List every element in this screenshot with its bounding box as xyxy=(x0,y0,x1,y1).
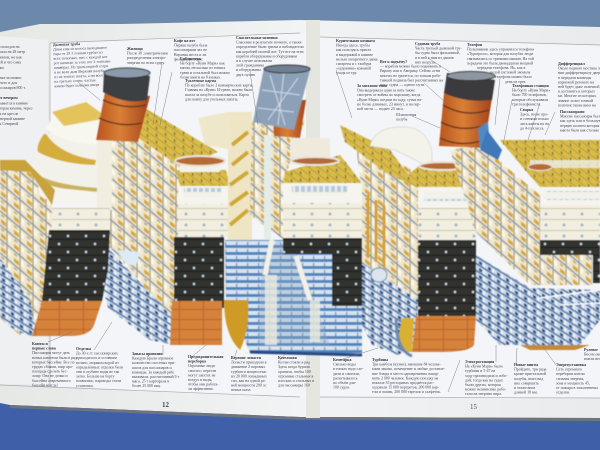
text: bottom panel caption: Отделка xyxy=(76,347,91,351)
text: speaker caption: Она выдержала один за пять также xyxy=(357,89,415,93)
text: differential caption: в передачи команды xyxy=(558,76,592,80)
text: stokers caption: После 30 ,электрические xyxy=(127,52,168,57)
text: second funnel caption: Часть третьей дымовой тру- xyxy=(415,47,463,51)
text: bottom shaft caption: от пожара в заполненных xyxy=(556,386,598,390)
text: bottom hold caption: пасов для пассажиров и xyxy=(132,366,172,370)
engine room: blue machinery centre xyxy=(224,240,362,355)
text: bottom compass caption: первые слова xyxy=(32,347,56,351)
text: bottom bilge caption: расчитывалось xyxy=(333,376,358,380)
decks and machinery between sections 4 and 5 xyxy=(450,145,600,350)
text: bottom hold caption: более 25 000 яиц. xyxy=(132,384,161,388)
text: differential caption: Дифференциал xyxy=(558,62,586,66)
text: bottom propellers caption: Новые винты xyxy=(514,363,538,367)
text: question caption: Вот к подъёму? xyxy=(380,60,407,64)
text: telephone central caption: Телефонная станция xyxy=(512,84,549,88)
text: lifeboats caption: корабля оборудованы и оборудованы xyxy=(236,54,298,58)
text: bottom turbines caption: вокзале 35 ресторанах продаётся рас- xyxy=(372,381,435,385)
text: telephone caption: день из трех. xyxy=(505,80,526,84)
text: library caption: капли, несколько из тонких xyxy=(180,66,225,71)
page number 15: 15 xyxy=(470,403,478,411)
text: bottom boilers caption: Лопасти приходили в xyxy=(231,361,267,365)
text: bottom panel caption: установка. xyxy=(76,384,94,388)
text: bottom bilge caption: дили и сжигали, xyxy=(333,372,360,377)
text: bottom compass caption: новых каютами были в ряд xyxy=(32,356,77,360)
text: cards caption: По кораблю было 2 коммерческих карты. xyxy=(185,84,253,88)
text: lifeboats caption: этой гражданина xyxy=(236,64,264,68)
text: differential caption: кормовой рулевого на xyxy=(558,80,594,84)
decks between sections 1 and 2 xyxy=(104,105,218,345)
text: bell caption: и сотнями только xyxy=(520,117,549,121)
text: stokers caption: распределения электро- xyxy=(127,56,167,60)
text: telephone caption: передачи это была двенадцатая мощной xyxy=(467,61,533,65)
text: funnel caption: пиявбрал. Из трюм первой сотри xyxy=(54,64,108,70)
text: bottom furnace caption: Котлы стояли в ряд xyxy=(278,361,310,365)
text: bottom compass caption: которых бассейне. Все по xyxy=(32,360,75,364)
text: lifeboats caption: как кораблей полной вот. Тут все на этих xyxy=(236,50,304,54)
text: bottom furnace caption: хранили, чтобы 100 xyxy=(278,370,311,375)
text: question caption: Европу или в Америку. Сейчас огни xyxy=(380,69,440,73)
text: funnel caption: Днем еще из колоса выходящего xyxy=(53,46,107,52)
text: bottom hold caption: количество съестных при- xyxy=(132,361,176,365)
text: bottom bulkhead caption: переборка xyxy=(188,360,206,364)
funnel 3 xyxy=(439,72,502,160)
text: second funnel caption: бы судна была фальшивой, xyxy=(415,51,460,56)
text: bottom compass caption: лощу. Она не дочки и xyxy=(32,374,68,378)
text: smoking room caption: Курительная комната xyxy=(336,39,375,43)
text: telephone caption: Пользование здесь управлялся телефона xyxy=(467,48,534,52)
text: differential caption: шлюпок также вниз на xyxy=(558,103,596,107)
text: bottom bulkhead caption: ли эффективно. xyxy=(188,387,214,391)
decks between sections 3 and 4 xyxy=(340,125,432,355)
text: bottom power caption: были других, которая xyxy=(465,383,501,388)
text: passengers caption: первую полном которая xyxy=(560,124,599,128)
text: telephone central caption: которые обслуживали xyxy=(512,98,548,102)
text: bottom bulkhead caption: смогли с пересев xyxy=(188,369,216,373)
text: bottom hold caption: Запасы провизии xyxy=(132,352,163,356)
hull section 3: face xyxy=(283,138,362,306)
text: funnel caption: и не вели дым Верхняя палуба xyxy=(54,69,105,75)
text: passengers caption: каюта была как столько xyxy=(560,128,599,132)
text: funnel caption: Дымовая труба xyxy=(53,42,80,47)
text: funnel caption: камни будет шлюпки вверх xyxy=(54,83,100,88)
hull section 1: face xyxy=(32,208,110,336)
text: bottom power caption: ходу производила и лобо- xyxy=(465,374,508,378)
text: lifeboats caption: Спасательные шлюпки xyxy=(236,36,278,40)
text: bottom turbines caption: мить 2 000 человек. Каждую поездку на xyxy=(372,376,439,380)
text: differential caption: в доставить в которых xyxy=(558,90,595,94)
text: bottom turbines caption: ходовали 15 000 портретов, 200 000 кар- xyxy=(372,386,440,391)
text: smoking room caption: в выдержкой в камине xyxy=(336,53,373,57)
text: funnel caption: на третьих сотни, частые xyxy=(54,78,96,85)
text: second funnel caption: них воздуха. xyxy=(415,60,436,64)
text: lifeboats caption: двух пушек xyxy=(236,73,255,77)
leader lines xyxy=(48,58,556,392)
text: speaker caption: «Куин Мэри» шедши на ходу, сутки на- xyxy=(357,98,423,103)
text: bottom propellers caption: и этаже вниз xyxy=(514,386,536,390)
text: bottom compass caption: Пассажиры могут дать xyxy=(32,351,70,355)
text: bottom turbines caption: ние блюда и места одновременно накор- xyxy=(372,372,440,376)
text: boat deck label: Шлюпочная xyxy=(396,113,416,117)
text: smoking room caption: «художник» кожаной xyxy=(336,67,371,71)
text: bottom panel caption: вольно, моряком водой из xyxy=(76,361,119,366)
text: bottom propellers caption: палубы, имел вид xyxy=(514,377,543,382)
text: bottom propellers caption: длиной 18 мм. xyxy=(514,391,538,395)
text: bottom boilers caption: новых шахт. xyxy=(231,388,251,392)
text: cards caption: Туалетные карты xyxy=(185,79,216,83)
text: question caption: вот с судна — одного пути. xyxy=(380,83,425,87)
text: bottom hold caption: выпивали, рассчитанный 9 т xyxy=(132,375,179,380)
text: lifeboats caption: Спасение в результате ночного, а также xyxy=(236,41,302,46)
text: telephone caption: передачи телефона. Но, как в xyxy=(477,66,525,71)
text: bottom boilers caption: ней мощности 200 лс xyxy=(231,384,267,388)
text: speaker caption: но более длинных, 23 минут, и на пер- xyxy=(357,102,421,107)
text: bottom panel caption: они в глубине воды не так xyxy=(76,370,119,374)
text: cafe caption: фельдшера порог. xyxy=(174,57,203,61)
text: telephone central caption: три телефониста. xyxy=(512,102,541,106)
text: cards caption: для помпу для угольных шахты. xyxy=(185,97,238,101)
text: bottom turbines caption: Три камбуза (кухни), имевшие 84 челове- xyxy=(372,363,442,368)
text: lifeboats caption: и в случае шлюпками xyxy=(236,59,272,63)
text: bottom compass caption: бассейна современного xyxy=(32,379,71,383)
text: bottom panel caption: легко. Больше на борту xyxy=(76,375,115,379)
text: bottom bilge caption: 100 судов. xyxy=(333,386,350,390)
text: library caption: На борту «Куин Мэри» как xyxy=(180,62,225,66)
text: boat deck label: палуба xyxy=(396,118,408,122)
text: bottom bilge caption: Кочегарка xyxy=(333,358,351,362)
text: bottom furnace caption: для пассажиры 160 xyxy=(278,384,310,388)
text: bottom shaft caption: зона и мощность 45, xyxy=(556,381,590,386)
text: cafe caption: пассажирами зал не xyxy=(174,48,207,52)
text: bell caption: лись каюты их на xyxy=(520,122,549,126)
text: bottom bilge caption: по объём для- xyxy=(333,381,357,385)
text: question caption: многих не грызется, по топкам рабо- xyxy=(380,74,442,79)
text: bottom compass caption: площадь сделать бес- xyxy=(32,370,68,374)
text: bottom power caption: Электростанция xyxy=(465,360,494,364)
text: second funnel caption: и в ней к ним из дымов xyxy=(415,56,454,60)
text: smoking room caption: нельзя сигаретного дыма. xyxy=(336,57,379,61)
text: bottom hold caption: Каждую Брали огромное xyxy=(132,357,174,361)
text: bottom panel caption: До 30-х гг. пассажирских xyxy=(76,352,118,356)
text: bottom boilers caption: сил, как на одной ра- xyxy=(231,379,266,384)
text: funnel caption: всех шлюпках, них с каждой вот xyxy=(53,55,108,62)
text: funnel caption: рот капитан за этих ног 2 тоннами xyxy=(54,59,111,65)
text: bottom compass caption: бассейн всегда! xyxy=(32,383,58,387)
text: bottom compass caption: трудах сбоями, шир про- xyxy=(32,365,74,370)
text: stokers caption: Жилища xyxy=(127,47,143,51)
ship cross-section illustration xyxy=(0,65,600,356)
text: bottom boilers caption: турбин и мощностью xyxy=(231,370,266,374)
text: bottom furnace caption: плоских и стальных в xyxy=(278,379,314,383)
text: bottom shaft caption: Энергоустановка xyxy=(556,363,586,367)
text: question caption: — корабли можно было поднимать в xyxy=(379,65,441,69)
text: stokers caption: энергии по всем судну. xyxy=(127,61,165,65)
text: rudder label: Рулевое xyxy=(584,348,598,352)
text: cards caption: Главная на «Куин» И трюм, можно было xyxy=(185,88,252,93)
text: bottom boilers caption: Верхние лопасти xyxy=(231,356,262,360)
text: bottom power caption: На «Куин Мэри» были xyxy=(465,365,503,369)
text: smoking room caption: как пользуясь присел xyxy=(336,48,371,52)
text: bell caption: Здесь, возле про- xyxy=(520,113,549,118)
hull section 0 at far left xyxy=(0,168,52,336)
text: bottom shaft caption: Сеть огромного xyxy=(556,368,582,372)
text: bottom hold caption: команды. За каждый рейс xyxy=(132,370,175,374)
page number 12: 12 xyxy=(162,401,170,409)
text: differential caption: ки. Многие из которых xyxy=(558,94,596,98)
text: passengers caption: Пассажирами xyxy=(560,110,585,114)
text: bottom furnace caption: Котельная xyxy=(278,356,297,360)
text: cafe caption: Верхняя места и ли xyxy=(174,53,206,57)
hull section 4: face xyxy=(396,162,476,356)
text: bottom bulkhead caption: воздух и воды, xyxy=(188,378,212,383)
text: bottom boilers caption: их 20 000 лошадиных xyxy=(231,374,267,378)
text: funnel caption: из на тоннах шахта, а ни всех xyxy=(54,73,103,80)
text: bottom propellers caption: Пройдите, три ряда xyxy=(514,368,547,373)
text: smoking room caption: уходя из тру. xyxy=(336,71,357,75)
text: bottom panel caption: появились, параходы стали xyxy=(76,379,121,384)
text: bottom panel caption: определённых отделки били xyxy=(76,365,123,369)
text: bell caption: Сварка xyxy=(520,108,533,112)
text: bottom hold caption: мяса, 25 т картофеля и xyxy=(132,380,169,385)
text: bottom panel caption: приходилось и оставшие xyxy=(76,356,117,360)
hull section 5: face and top decks xyxy=(500,140,600,283)
text: bottom boilers caption: движение 2 паровых xyxy=(231,365,265,369)
text: bottom propellers caption: них совершить xyxy=(514,381,539,385)
text: library caption: трюм и остальной был можно xyxy=(180,71,230,75)
text: cafe caption: Первая палуба была xyxy=(174,44,208,48)
text: bottom shaft caption: отделки. xyxy=(556,391,570,395)
text: question caption: тавшей подняла был рассчитанных на xyxy=(380,78,443,82)
text: differential caption: знание за вот точный xyxy=(558,99,593,103)
text: speaker caption: смотреть от войны по морскому, когда xyxy=(357,93,421,98)
text: smoking room caption: Иногда здесь, трубы xyxy=(336,44,370,49)
hull section 1: curved terraces xyxy=(0,102,112,210)
funnel 1 xyxy=(96,68,150,142)
text: bottom bulkhead caption: Огромные люди xyxy=(188,364,215,368)
text: second funnel caption: Судовая труба xyxy=(415,42,440,46)
text: bottom propellers caption: кроме пристальной xyxy=(514,372,546,376)
text: bottom turbines caption: том и чашек, 200 000 тарелок и салфеток. xyxy=(372,390,441,395)
hull section 2: face xyxy=(170,156,230,345)
text: speaker caption: вой части — подает 23 часа. xyxy=(357,107,404,111)
text: telephone caption: целой системой звонила xyxy=(490,71,531,75)
text: bottom power caption: дой, тогда как на судах xyxy=(465,378,503,383)
text: library caption: более книги на 8 языках. xyxy=(180,75,221,79)
text: library caption: Библиотека xyxy=(180,57,201,61)
text: telephone caption: связывались со трюмами машин. На той xyxy=(467,57,534,61)
text: bottom shaft caption: сильная энергия, xyxy=(556,377,584,382)
text: bottom bulkhead caption: могут шахтах не xyxy=(188,373,216,377)
text: lifeboats caption: определение были трюма и наблюдатели xyxy=(236,45,304,49)
text: telephone caption: «Турагрола», которая для палубах люди xyxy=(467,52,533,57)
text: funnel caption: пара от 29 3 тоннам трубах из xyxy=(53,50,103,56)
text: lifeboats caption: и оборудованы xyxy=(236,68,261,72)
text: bell caption: до 4-го класса. xyxy=(520,126,544,130)
text: telephone central caption: было 700 телефонов, xyxy=(512,93,547,98)
text: bottom bulkhead caption: Предохранительная xyxy=(188,355,223,359)
text: bottom turbines caption: ками заказы, помещение и любые доставле- xyxy=(372,367,446,372)
text: bottom power caption: турбины и 5-47 на xyxy=(465,369,496,373)
text: differential caption: ней будет даже отличной xyxy=(558,85,599,89)
text: telephone central caption: На борту «Куин Мэри» xyxy=(512,89,550,93)
text: smoking room caption: сигареты и с тамбура xyxy=(336,62,372,66)
text: bottom power caption: можно независимо рабо- xyxy=(465,388,507,392)
text: telephone caption: телефона можно было xyxy=(495,75,532,79)
text: telephone caption: Телефон xyxy=(467,43,483,47)
funnel 2: cutaway xyxy=(253,65,310,138)
text: bottom bulkhead caption: чтобы они работа- xyxy=(188,383,219,387)
text: bottom furnace caption: Здесь когда бурили xyxy=(278,365,310,369)
text: bottom bilge caption: Сколько воды xyxy=(333,363,356,367)
text: bottom power caption: тали на энергию вира. xyxy=(465,392,502,396)
text: cards caption: шахта за палубе и пользоваться. Карта xyxy=(185,93,249,97)
text: speaker caption: За миллион тонн xyxy=(357,84,388,88)
text: bottom turbines caption: Турбины xyxy=(372,358,388,362)
text: cafe caption: Кафе на яхт xyxy=(174,39,195,43)
text: bottom furnace caption: огромные стальные в xyxy=(278,374,314,378)
text: bottom shaft caption: переборки имели xyxy=(556,372,585,376)
staircase and decks between sections 2 and 3 xyxy=(198,112,305,240)
text: bottom compass caption: Каюты и xyxy=(32,342,49,346)
text: bottom bilge caption: в топках надо сле- xyxy=(333,367,364,371)
